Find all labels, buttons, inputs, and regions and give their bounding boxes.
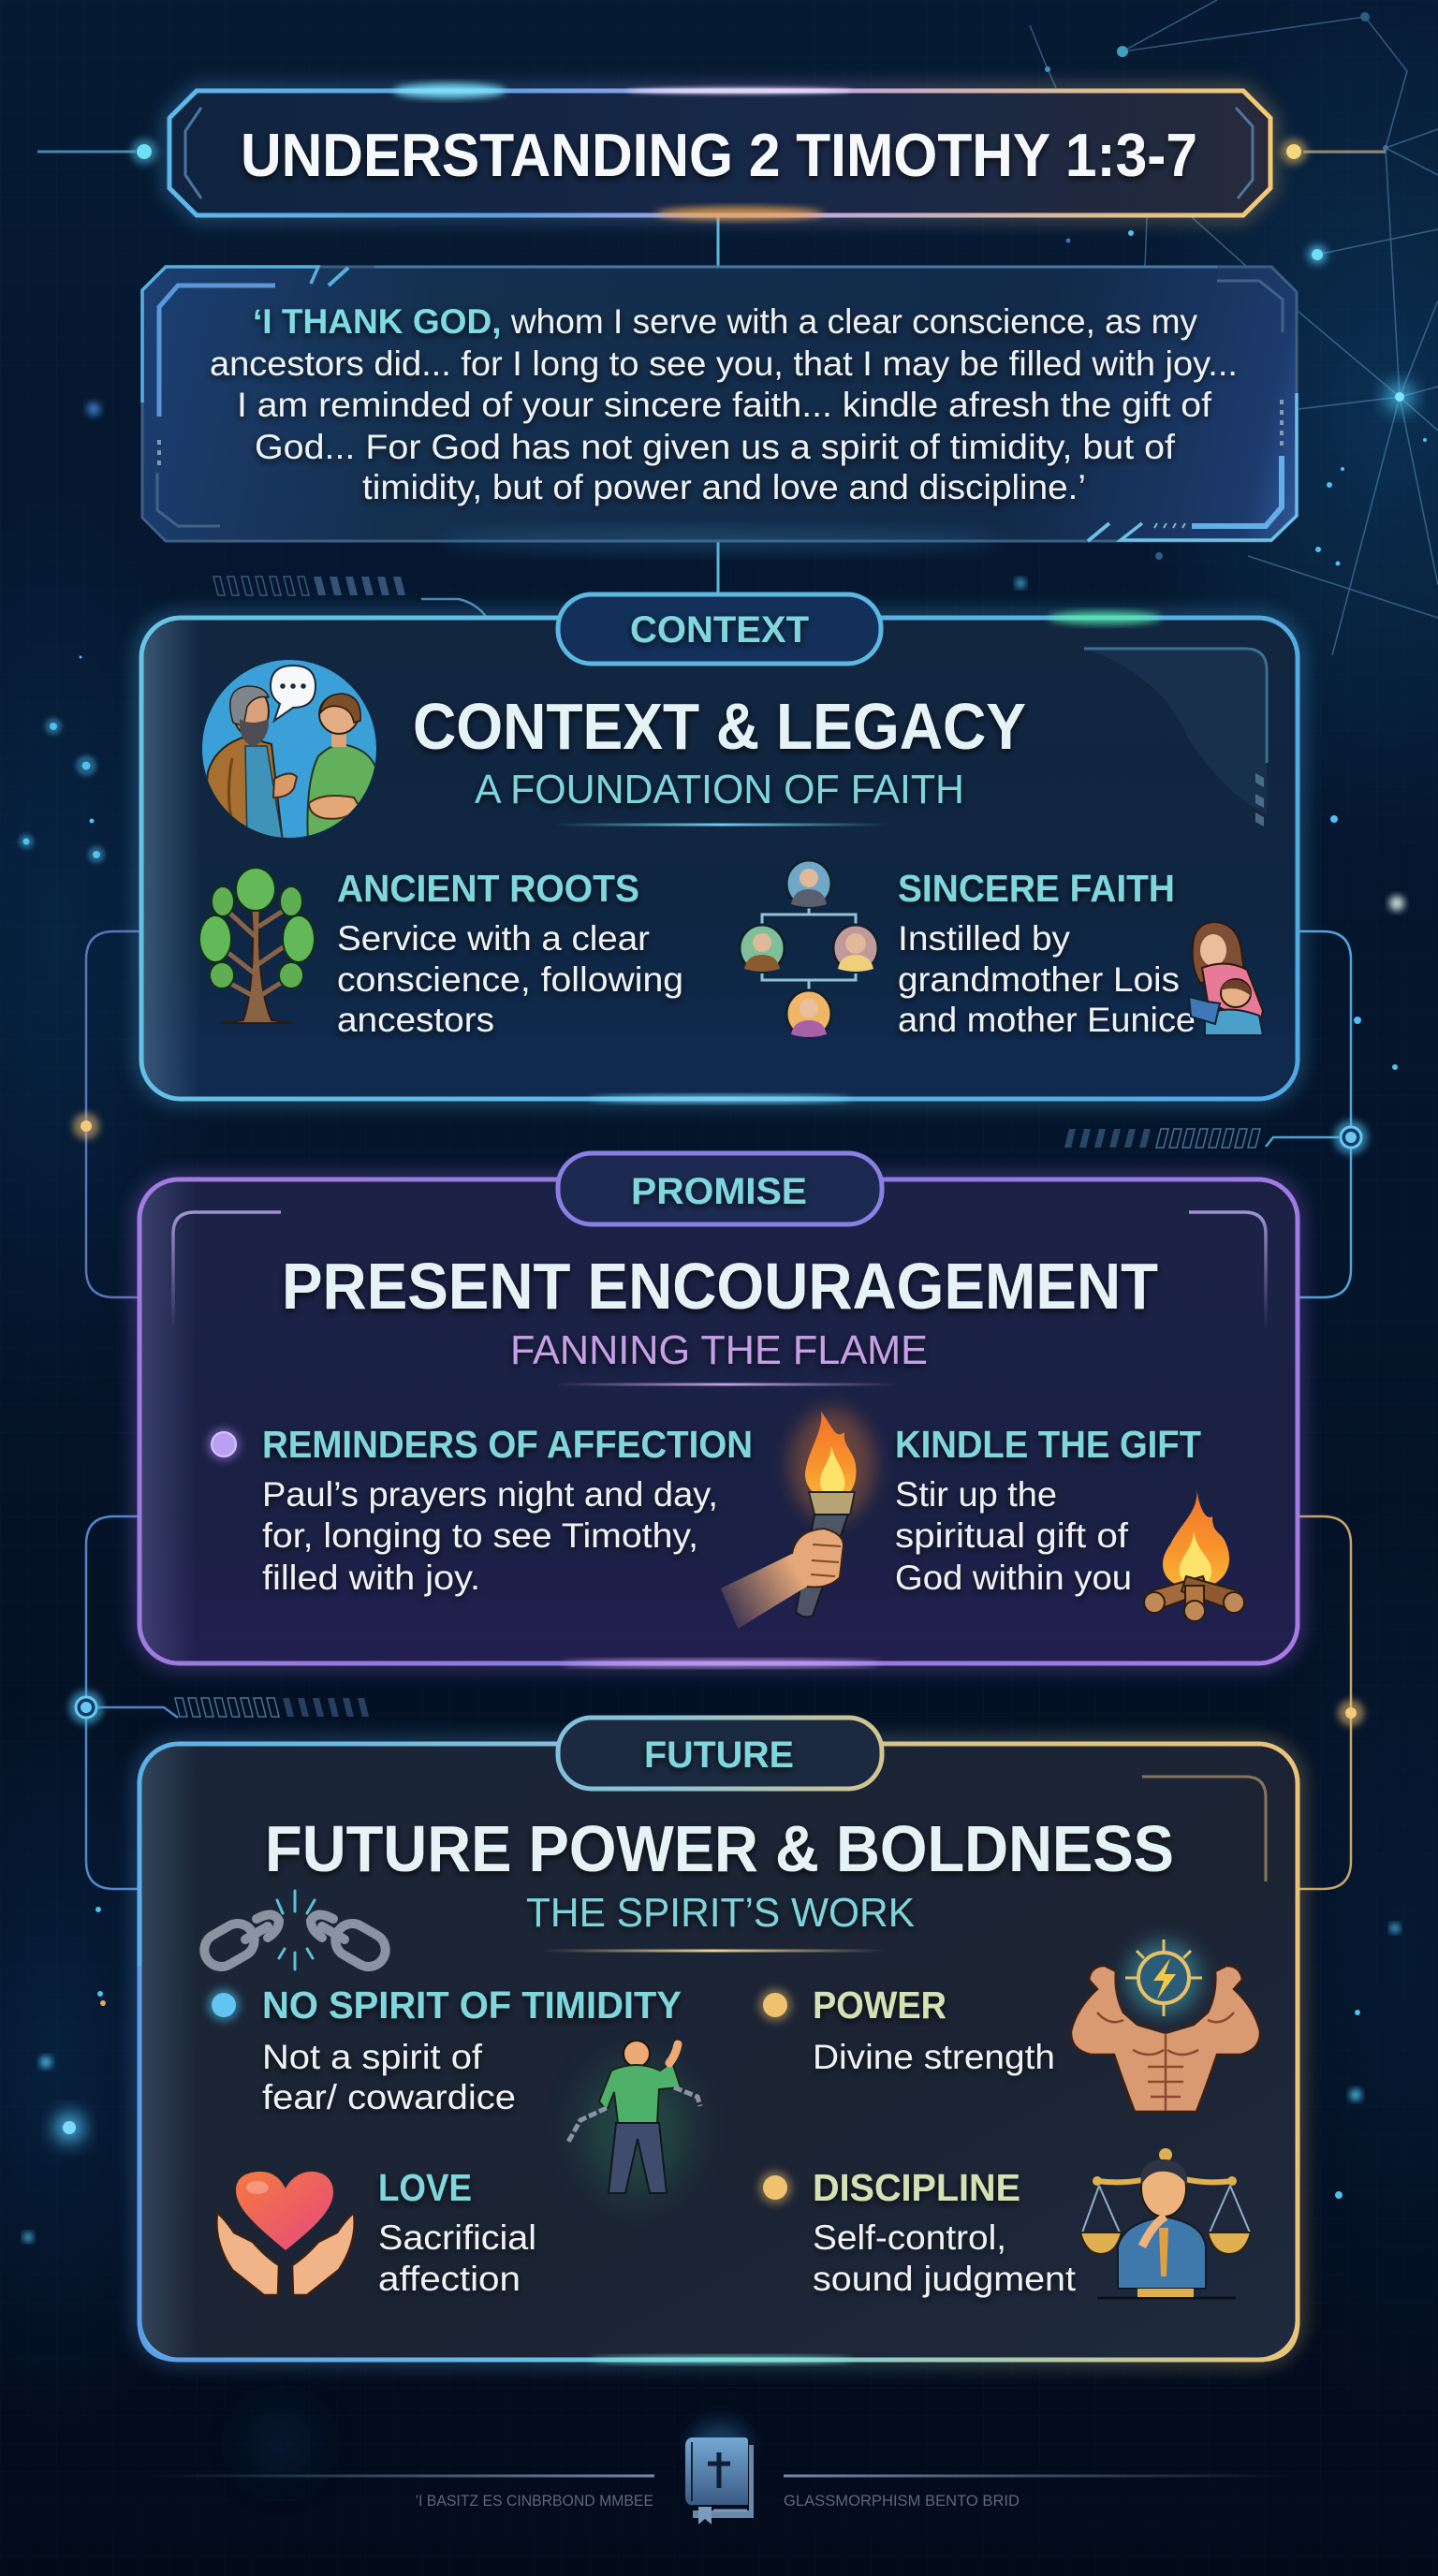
text: power: POWER bbox=[813, 1983, 946, 2027]
quote text: ‘I THANK GOD, whom I serve with a clear conscience, as my bbox=[253, 302, 1197, 341]
icon: torch bbox=[721, 1409, 874, 1629]
text: discipline bbox=[813, 2166, 1077, 2298]
connectors between panels bbox=[86, 215, 1351, 1889]
bullet bbox=[207, 1988, 241, 2022]
quote text: I am reminded of your sincere faith... kindle afresh the gift of bbox=[237, 386, 1212, 424]
footer bbox=[150, 2422, 1292, 2525]
icon: figure breaking chains bbox=[567, 2041, 700, 2195]
title banner bbox=[37, 83, 1386, 220]
text: love: LOVE bbox=[378, 2166, 472, 2209]
text: reminders of affection: Paul’s prayers night and day, bbox=[262, 1475, 718, 1514]
heading bbox=[265, 1812, 1174, 1936]
heading: FANNING THE FLAME bbox=[510, 1327, 928, 1373]
text: sincere faith: Instilled by bbox=[898, 919, 1071, 958]
text: no spirit of timidity: fear/ cowardice bbox=[262, 2078, 516, 2116]
text: discipline: Self-control, bbox=[813, 2218, 1006, 2257]
text: reminders of affection: filled with joy. bbox=[262, 1559, 480, 1597]
icon: tree bbox=[199, 868, 315, 1023]
text: power: Divine strength bbox=[813, 2038, 1055, 2076]
heading bbox=[282, 1250, 1158, 1373]
text: reminders of affection: for, longing to see Timothy, bbox=[262, 1516, 698, 1555]
text: discipline: DISCIPLINE bbox=[813, 2166, 1020, 2209]
text: ancient roots: ancestors bbox=[337, 1001, 494, 1039]
text: kindle the gift: KINDLE THE GIFT bbox=[895, 1423, 1201, 1466]
text: sincere faith: grandmother Lois bbox=[898, 960, 1180, 999]
text: sincere faith: SINCERE FAITH bbox=[898, 867, 1175, 910]
section tag: promise bbox=[558, 1153, 882, 1224]
icon: campfire bbox=[1144, 1486, 1244, 1621]
text: love: Sacrificial bbox=[378, 2218, 536, 2257]
icon: heart in hands bbox=[216, 2172, 355, 2295]
icon: mother reading to child bbox=[1189, 922, 1263, 1035]
bullet bbox=[758, 1988, 792, 2022]
section tag: context: CONTEXT bbox=[630, 609, 809, 651]
title banner: UNDERSTANDING 2 TIMOTHY 1:3-7 bbox=[241, 121, 1197, 189]
scripture quote panel bbox=[142, 267, 1297, 550]
heading: PRESENT ENCOURAGEMENT bbox=[282, 1250, 1158, 1323]
text: no spirit of timidity bbox=[262, 1983, 682, 2116]
text: no spirit of timidity: Not a spirit of bbox=[262, 2038, 483, 2076]
quote text: ancestors did... for I long to see you, that I may be filled with joy... bbox=[210, 344, 1238, 383]
heading: FUTURE POWER & BOLDNESS bbox=[265, 1812, 1174, 1885]
text: sincere faith: and mother Eunice bbox=[898, 1001, 1196, 1039]
text: kindle the gift bbox=[895, 1423, 1201, 1597]
heading: CONTEXT & LEGACY bbox=[413, 690, 1026, 763]
heading bbox=[413, 690, 1026, 812]
connector nodes and hatch strips bbox=[69, 577, 1368, 1726]
quote text: God... For God has not given us a spirit of timidity, but of bbox=[255, 428, 1176, 466]
panel: present encouragement bbox=[139, 1153, 1298, 1667]
section tag: future bbox=[558, 1718, 882, 1789]
bullet bbox=[207, 1427, 241, 1461]
text: ancient roots: ANCIENT ROOTS bbox=[337, 867, 639, 910]
text: love: affection bbox=[378, 2260, 521, 2298]
text: ancient roots: Service with a clear bbox=[337, 919, 650, 958]
text: ancient roots bbox=[337, 867, 683, 1039]
section tag: future: FUTURE bbox=[644, 1734, 794, 1776]
text: no spirit of timidity: NO SPIRIT OF TIMIDITY bbox=[262, 1983, 682, 2027]
footer note left: 'I BASITZ ES CINBRBOND MMBEE bbox=[416, 2492, 653, 2510]
icon: muscular figure with lightning bbox=[1071, 1939, 1260, 2112]
text: kindle the gift: spiritual gift of bbox=[895, 1516, 1129, 1555]
icon: family tree bbox=[740, 860, 878, 1037]
text: discipline: sound judgment bbox=[813, 2260, 1077, 2298]
text: reminders of affection: REMINDERS OF AFFECTION bbox=[262, 1423, 753, 1466]
icon: broken chains bbox=[198, 1891, 391, 1973]
panel: future power and boldness bbox=[139, 1718, 1298, 2364]
text: sincere faith bbox=[898, 867, 1196, 1039]
footer note right: GLASSMORPHISM BENTO BRID bbox=[784, 2492, 1020, 2510]
section tag: promise: PROMISE bbox=[631, 1171, 807, 1212]
quote text: timidity, but of power and love and discipline.’ bbox=[362, 468, 1086, 506]
icon: bible bbox=[685, 2437, 754, 2525]
section tag: context bbox=[558, 594, 881, 664]
icon: Paul and Timothy talking bbox=[201, 660, 376, 842]
text: love bbox=[378, 2166, 536, 2298]
text: reminders of affection bbox=[262, 1423, 753, 1597]
bullet bbox=[758, 2171, 792, 2204]
text: kindle the gift: Stir up the bbox=[895, 1475, 1057, 1514]
text: kindle the gift: God within you bbox=[895, 1559, 1132, 1597]
panel: context and legacy bbox=[112, 594, 1298, 1103]
text: power bbox=[813, 1983, 1055, 2076]
heading: THE SPIRIT’S WORK bbox=[526, 1890, 915, 1936]
heading: A FOUNDATION OF FAITH bbox=[475, 767, 964, 812]
quote text bbox=[210, 302, 1238, 506]
icon: scales and thinker bbox=[1080, 2148, 1251, 2298]
text: ancient roots: conscience, following bbox=[337, 960, 683, 999]
